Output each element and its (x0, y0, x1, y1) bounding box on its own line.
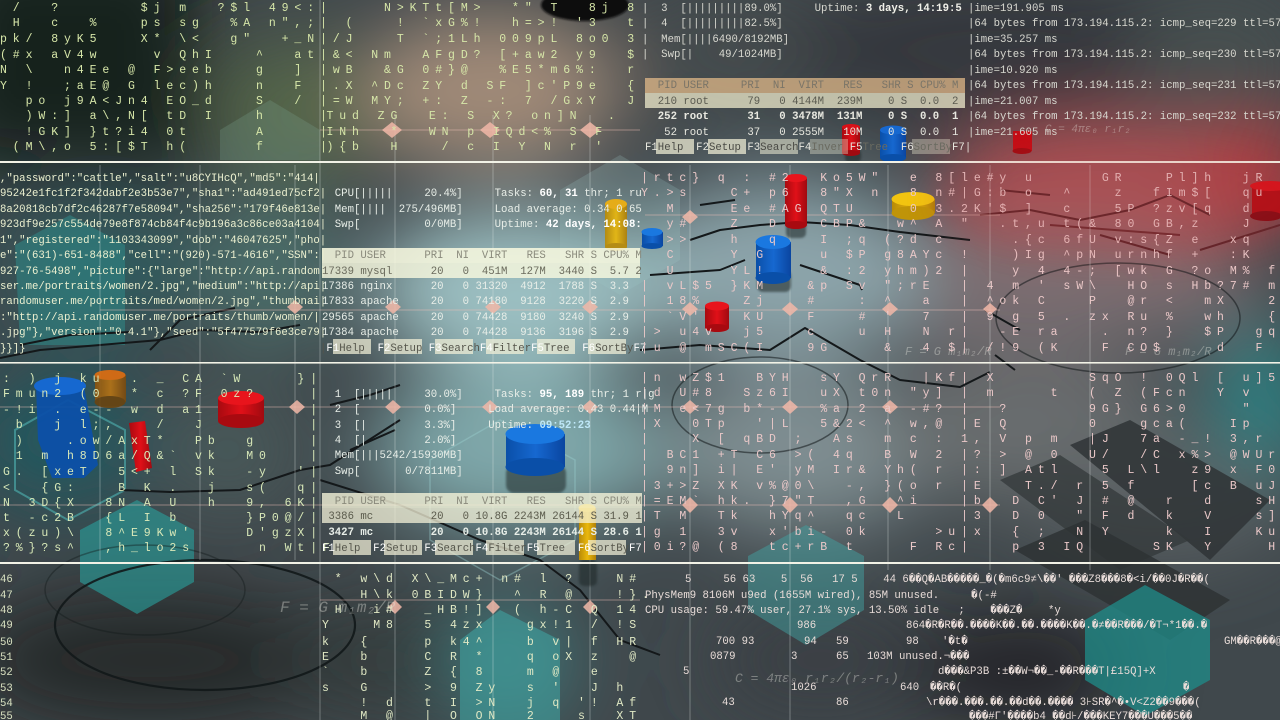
cylinder: yellow flat (892, 192, 935, 220)
text group: htop top right: | Mem[||||6490/8192MB] (642, 34, 789, 46)
text group: bottom line numbers: 53 (0, 683, 13, 695)
dark shapes top and tablet slabs (541, 0, 1270, 640)
text group: right matrix upper: |rtc} q : #2 Ko5W" e 8[le#y u GR Pl]h jR P (641, 172, 1280, 185)
text group: top-left character matrix: )W:] a\,N[ tD I h |Tud ZG E: S X? on]N . (0, 110, 621, 123)
text group: right matrix lower: |n wZ$1 BYH sY QrR |Kf| X SqO ! 0Ql [ u]5 (641, 372, 1280, 385)
text group: bottom right system log: \r���.���.��.��d��.���� 3⊦SR�^�•V<Z2��9���( (926, 695, 1201, 709)
text group: bottom right system log: 98 (906, 636, 919, 648)
cylinder: yellow bottom (578, 504, 596, 560)
text group: htop top right: |64 bytes from 173.194.115.2: icmp_seq=229 ttl=57 (968, 18, 1280, 30)
text group: htop top right: |ime=191.905 ms (968, 3, 1064, 15)
text group: bottom right system log: 5 56 63 5 56 17 5 44 6��Q�AB�����_�(�m6c9≠\��' ���Z8���8�<i/��0J�R��( (685, 572, 1210, 586)
vignette tint: red wash right (930, 140, 1280, 260)
text group: htop middle: PID USER PRI NI VIRT RES SHR S CPU% M (322, 250, 642, 262)
text group: htop middle: 17339 mysql 20 0 451M 127M 3440 S 5.7 2 (322, 266, 642, 278)
text group: left matrix lower (3, 373, 336, 555)
cylinder: red top (842, 124, 860, 156)
text group: bottom centre matrix: * w\d X\_Mc+ n# l ? N# (322, 573, 642, 586)
text group: bottom right system log: CPU usage: 59.47% user, 27.1% sys, 13.50% idle ; ���Z� *y (645, 603, 1061, 617)
equation watermarks (280, 124, 1212, 686)
text group: htop lower: Mem[|||5242/15930MB] (322, 450, 463, 462)
text group: top-left character matrix: (#x aV4w v QhI ^ at|&< Nm AFgD? [+aw2 y9 $ (0, 49, 640, 62)
text group: JSON dump: ,"password":"cattle","salt":"u8CYIHcQ","md5":"414| (0, 173, 320, 185)
text group: left matrix lower: ) .ow/AxT* Pb g | (3, 435, 323, 448)
text group: htop lower (322, 389, 655, 555)
text group: right matrix upper: |> u4v j5 c u H N r| -E ra . n? } $P gqY (641, 326, 1280, 339)
text group: JSON dump: :"http://api.randomuser.me/portraits/thumb/women/| (0, 312, 320, 324)
text group: right matrix upper: U YL! & :2 yhm)2 | y 4 4-; [wk G ?o M% f (641, 265, 1280, 278)
text group: htop top right: |ime=35.257 ms (968, 34, 1058, 46)
text group: bottom centre matrix: Y M8 5 4zx gx!1 / !S (322, 619, 642, 632)
text group: htop middle: 17386 nginx 20 0 31320 4912 1788 S 3.3 (322, 281, 629, 293)
text group: htop lower: 4 [| 2.0%] (322, 435, 456, 447)
text group: left matrix lower: ?%}?s^ ,h_lo2s n Wt|F (3, 542, 336, 555)
text group: bottom right system log: 103M unused.¬��� (867, 649, 969, 663)
text group: htop middle: 29565 apache 20 0 74428 9180 3240 S 2.9 (322, 312, 629, 324)
text group: bottom centre matrix: s G > 9 Zy s ' J h (322, 682, 629, 695)
text group: bottom centre matrix (322, 573, 655, 720)
cylinder: blue centre (756, 235, 791, 284)
text group: JSON dump: e":"(631)-651-8488","cell":"(920)-571-4616","SSN":| (0, 250, 326, 262)
text group: top-left character matrix (0, 2, 640, 154)
text group: right matrix upper: Y.>s C+ p6 8"X n 8 n#|G:b o ^ z fIm$[ qu (641, 187, 1268, 200)
text group: bottom right system log: 700 93 (716, 636, 754, 648)
text group: htop top right: 210 root 79 0 4144M 239M 0 S 0.0 2 (645, 96, 958, 108)
text group: right matrix lower: | BC1 +T C6 >( 4q B W 2 |? > @ 0 U/ /C x%> @WUry (641, 449, 1280, 462)
text group: htop top right: |ime=21.007 ms (968, 96, 1058, 108)
text group: right matrix lower: |d U#8 Sz6I uX t0n "y] | m t ( Z (Fcn Y v (641, 387, 1255, 400)
cylinder: blue top (880, 126, 906, 162)
function key bars (333, 139, 950, 555)
text group: bottom right system log: 5 (683, 666, 689, 678)
text group: htop lower: 3386 mc 20 0 10.8G 2243M 26144 S 31.9 1 (322, 511, 642, 523)
text group: right matrix lower: |T M Tk hYq^ qc L |3 D 0 " F d k V s]T (641, 510, 1280, 523)
text group: bottom right system log: 640 (900, 682, 919, 694)
cylinder: red wide (218, 391, 264, 428)
text group: right matrix upper: C Y G u $P g8AYc ! )Ig ^pN urnhf + :K (641, 249, 1255, 262)
cylinder: orange left (94, 370, 126, 408)
text group: left matrix lower: < {G: B K . j s( q| (3, 482, 323, 495)
text group: top-left character matrix: / ? $j m ?$l 49<:| N>KTt[M> *" T 8j 8 (0, 2, 640, 15)
text group: htop lower: 1 [||||| 30.0%] Tasks: 95, 189 thr; 1 r|g (322, 389, 655, 401)
cylinder: red small top right (1012, 131, 1032, 154)
text group: htop top right (642, 3, 1280, 154)
text group: right matrix lower (641, 372, 1280, 554)
text group: htop top right: |ime=21.605 ms (968, 127, 1058, 139)
text group: right matrix upper (641, 172, 1280, 355)
text group: right matrix lower: |0i?@ (8 tc+rB t F Rc| p 3 IQ SK Y H (641, 541, 1280, 554)
text group: htop lower: F1Help F2Setup F3SearchF4FilterF5Tree F6SortByF7 (322, 543, 642, 555)
text group: right matrix upper: | 18% Zj # : ^ a | ^ok C P @r < mX 2 (641, 295, 1280, 308)
text group: left matrix lower: -!i . e-- w d a1 | (3, 404, 323, 417)
text group: left matrix lower: : ) j ku . _ CA `W }| (3, 373, 323, 386)
text group: bottom right system log (645, 572, 1280, 720)
text group: JSON dump: }}]} (0, 343, 26, 355)
horizontal panel dividers (0, 161, 1280, 564)
text group: htop top right: PID USER PRI NI VIRT RES SHR S CPU% M (645, 80, 958, 92)
text group: right matrix lower: |g 1 3v x'bi- 0k >u|x { ; N Y k I Ku (641, 526, 1280, 539)
text group: bottom right system log: 94 (804, 636, 817, 648)
text group: left matrix lower: Fmun2 (0 * c ?F 0z? | (3, 388, 323, 401)
text group: htop top right: |64 bytes from 173.194.115.2: icmp_seq=231 ttl=57 (968, 80, 1280, 92)
text group: bottom right system log: 3 (791, 651, 797, 663)
text group: bottom centre matrix: H i# _HB!] ( h-C Q 14 (322, 604, 642, 617)
text group: htop middle: Swp[ 0/0MB] Uptime: 42 days, 14:08: (322, 219, 642, 231)
text group: JSON dump: 1","registered":"1103343099","dob":"46047625","pho| (0, 235, 326, 247)
text group: right matrix upper: y# Z D CBP& w^ A " .t,u t(& 80 GB,z J (641, 218, 1255, 231)
text group: bottom right system log: 86 (836, 697, 849, 709)
text group: right matrix lower: |X 0Tp '|L 5&2< ^ w,@ |E Q 0 gca( Ip (641, 418, 1255, 431)
cylinder: small red (705, 302, 729, 332)
text group: bottom centre matrix: H\k 0BIDW} ^ R @ !}. (322, 589, 655, 602)
shadows (506, 150, 861, 586)
text group: bottom centre matrix: k { p k4^ b v| f HR (322, 636, 642, 649)
text group: htop middle (320, 188, 646, 355)
panel highlight bars (322, 78, 965, 523)
text group: right matrix upper: M Ee #AG QTU 0 3.2K'$ ] c 5P ?zv[q d (641, 203, 1255, 216)
text group: JSON dump: 8a20818cb7df2c46287f7e58094","sha256":"179f46e813e| (0, 204, 326, 216)
equation watermarks: C = 4πε₀ r₁r₂ (1045, 124, 1131, 136)
equation watermarks: F = G m₁m₂/R (905, 345, 992, 359)
equation watermarks: C = 4πε₀ r₁r₂/(r₂-r₁) (735, 671, 899, 686)
text group: bottom line numbers: 52 (0, 667, 13, 679)
text group: bottom right system log: d���&P3B :±��W¬��_-��R���T|£15Q]+X (938, 664, 1156, 678)
text group: htop middle: CPU[||||| 20.4%] Tasks: 60, 31 thr; 1 ru (322, 188, 642, 200)
text group: right matrix upper: | `V' KU F # ' 7 | 9 g 5 . zx Ru % wh {w (641, 311, 1280, 324)
text group: bottom line numbers: 51 (0, 652, 13, 664)
text group: left matrix lower: x(zu)\ 8^E9Kw' D'gzX| (3, 527, 323, 540)
text group: bottom right system log: 864�R�R��.����K��.��.����K��.�≠��R���/�T¬*1��.� (906, 618, 1207, 632)
equation watermarks: F = G m₁m₂/R (1125, 345, 1212, 359)
cylinder: big blue left (34, 377, 98, 478)
text group: htop top right: 252 root 31 0 3478M 131M 0 S 0.0 1 (645, 111, 958, 123)
text group: htop middle: |F1Help F2Setup F3SearchF4FilterF5Tree F6SortByF7 (320, 343, 646, 355)
text group: bottom right system log: 59 (836, 636, 849, 648)
text group: bottom line numbers: 48 (0, 605, 13, 617)
text group: left matrix lower: t -c2B {L I b }P0@/| (3, 512, 323, 525)
text group: bottom right system log: PhysMem9 8106M u9ed (1655M wired), 85M unused. �(-# (645, 588, 997, 602)
text group: htop top right: | 3 [|||||||||89.0%] Uptime: 3 days, 14:19:5 (642, 3, 962, 15)
text group: right matrix lower: |=EM` hk. }7"T ,G ^i |b D C' J # @ r d sH? (641, 495, 1280, 508)
text group: bottom right system log: 1026 (791, 682, 817, 694)
cylinder: yellow tall centre (605, 199, 627, 251)
text group: right matrix upper: |u @ mSC(I 9G & 4 $| /!9 (K F CO$ d F y (641, 342, 1280, 355)
text group: htop top right: F1Help F2Setup F3SearchF4Inver F5Tree F6SortByF7| (645, 142, 971, 154)
text group: htop top right: |64 bytes from 173.194.115.2: icmp_seq=230 ttl=57 (968, 49, 1280, 61)
text group: right matrix lower: | X [ qBD ; As m c : 1, V p m |J 7a -_! 3,r (641, 433, 1268, 446)
text group: htop top right: |64 bytes from 173.194.115.2: icmp_seq=232 ttl=57 (968, 111, 1280, 123)
text group: bottom line numbers: 46 (0, 574, 13, 586)
text group: right matrix lower: |M e<7g b*- %a 2 a -#? | ? 9G} G6>0 " (641, 403, 1255, 416)
cylinder: red tall (785, 174, 807, 229)
equation watermarks: F = G m₁m₂/R (280, 599, 396, 617)
text group: right matrix lower: | 9n] i| E' yM Ir& Yh( r |: ] Atl 5 L\l z9 x F0G (641, 464, 1280, 477)
text group: bottom centre matrix: ` b Z { 8 m @ e (322, 666, 604, 679)
network diamonds (287, 122, 998, 614)
text group: bottom right system log: ��R�( (930, 680, 962, 694)
text group: htop top right: | 4 [|||||||||82.5%] (642, 18, 783, 30)
cylinder: red right edge (1250, 181, 1280, 221)
text group: JSON dump: 923df9e257c554de79e8f874cb84f4c9b196a3c86ce03a4104| (0, 219, 326, 231)
text group: top-left character matrix: N \ n4Ee @ F>eeb g ] |wB &G 0#}@ %E5*m6%: r (0, 64, 640, 77)
text group: bottom centre matrix: ! d t I >N j q '! Af (322, 697, 642, 710)
text group: JSON dump: 95242e1fc1f2f342dabf2e3b53e7","sha1":"ad491ed75cf2| (0, 188, 326, 200)
text group: htop middle: Mem[|||| 275/496MB] Load average: 0.34 0.65 (322, 204, 642, 216)
text group: bottom right system log: 986 (797, 620, 816, 632)
cylinder: red leaning (129, 421, 152, 472)
text group: left matrix lower: G. [xeT 5<+ l Sk -y '| (3, 466, 323, 479)
text group: htop lower: 3427 mc 20 0 10.8G 2243M 26144 S 28.6 1 (322, 527, 642, 539)
text group: left matrix lower: N 3D{X 8N A U h 9, 6K| (3, 497, 323, 510)
text group: left matrix lower: b j l;, / J | (3, 419, 323, 432)
text group: right matrix upper: | vL$5 }KM &p Sv ";rE | 4 m ' sW\ HO s Hb?7# m (641, 280, 1280, 293)
text group: bottom line numbers: 54 (0, 698, 13, 710)
text group: top-left character matrix: !GK] }t?i4 0t A |INh * WN p IQd<% S F (0, 126, 608, 139)
text group: JSON dump: 927-76-5498","picture":{"large":"http://api.random| (0, 266, 326, 278)
text group: top-left character matrix: Y ! ;aE@ G lec)h n F |.X ^Dc ZY d SF ]c'P9e { (0, 80, 640, 93)
text group: htop lower: 3 [| 3.3%] Uptime: 09:52:23 (322, 420, 591, 432)
text group: JSON dump: randomuser.me/portraits/med/women/2.jpg","thumbnai| (0, 296, 326, 308)
text group: top-left character matrix: H c % ps sg %A n",;| ( ! `xG%! h=>! '3 t (0, 17, 640, 30)
text group: bottom line numbers: 47 (0, 590, 13, 602)
text group: bottom right system log: 65 (836, 651, 849, 663)
text group: bottom right system log: � (1183, 680, 1189, 694)
text group: bottom line numbers: 49 (0, 620, 13, 632)
cylinders: 3D data markers (34, 124, 1280, 586)
text group: bottom line numbers (0, 574, 13, 720)
text group: bottom centre matrix: E b C R * q oX z @ (322, 651, 642, 664)
cylinder: small blue (642, 228, 663, 249)
text group: htop lower: PID USER PRI NI VIRT RES SHR S CPU% M (322, 496, 642, 508)
text group: bottom right system log: 0879 (710, 651, 736, 663)
text group: htop middle: 17833 apache 20 0 74180 9128 3220 S 2.9 (322, 296, 629, 308)
text group: top-left character matrix: (M\,o 5:[$T h( f |){b H / c I Y N r ' (0, 141, 608, 154)
circle diagrams (45, 263, 1240, 690)
text group: htop lower: 2 [ 0.0%] Load average: 0.43 0.44|M (322, 404, 648, 416)
text group: htop top right: 52 root 37 0 2555M 10M 0 S 0.0 1 (645, 127, 958, 139)
text group: JSON dump (0, 173, 326, 355)
text group: left matrix lower: 1 m h8D6a/Q&` vk M0 | (3, 450, 323, 463)
text group: top-left character matrix: po j9A<Jn4 EO_d S / |=W MY; +: Z -: 7 /GxY J (0, 95, 640, 108)
text group: JSON dump: .jpg"},"version":"0.4.1"},"seed":"5f477579f6e3ce79| (0, 327, 326, 339)
text group: htop top right: |ime=10.920 ms (968, 65, 1058, 77)
text group: htop lower: Swp[ 0/7811MB] (322, 466, 463, 478)
world map outline (0, 190, 1280, 655)
text group: bottom right system log: 43 (722, 697, 735, 709)
text group: top-left character matrix: pk/ 8yK5 X* \< g" +_N|/J T `;1Lh 009pL 8o0 3 (0, 33, 640, 46)
text group: htop middle: 17384 apache 20 0 74428 9136 3196 S 2.9 (322, 327, 629, 339)
text group: htop top right: | Swp[| 49/1024MB] (642, 49, 783, 61)
text group: bottom line numbers: 50 (0, 637, 13, 649)
text group: right matrix upper: >> h q I ;q (?d c .{c 6fU v:s{Z e xq (641, 234, 1255, 247)
text group: JSON dump: ser.me/portraits/women/2.jpg","medium":"http://api| (0, 281, 326, 293)
text group: right matrix lower: |3+>Z XK v%@0\ -, }(o r |E T./ r 5 f [c B uJM (641, 480, 1280, 493)
cylinder: big blue centre (506, 424, 565, 476)
text group: bottom right system log: '�t� (942, 634, 968, 648)
